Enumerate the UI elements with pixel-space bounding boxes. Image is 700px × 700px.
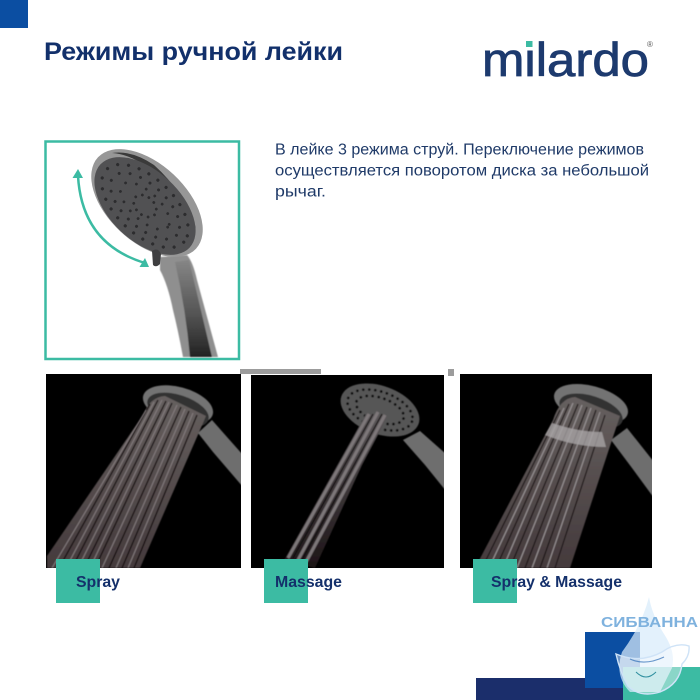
label: Spray & Massage: Spray & Massage — [491, 574, 622, 591]
handle — [403, 431, 446, 491]
decorative grey tabs — [240, 369, 454, 376]
handle — [160, 255, 218, 357]
description text: осуществляется поворотом диска за небольшой — [275, 162, 649, 180]
panel: Massage photo — [251, 373, 446, 568]
head rim and spray face — [71, 129, 223, 277]
title: Режимы ручной лейки — [44, 38, 343, 66]
logo: milardo: milardo — [482, 33, 649, 86]
water spray — [47, 396, 206, 568]
rotation arrow — [72, 169, 149, 267]
watermark: СИБВАННА — [601, 597, 699, 694]
description text: В лейке 3 режима струй. Переключение режимов — [275, 142, 644, 158]
head — [142, 384, 214, 426]
corner accent square — [0, 0, 28, 28]
label: Spray: Spray — [76, 574, 120, 591]
label: Spray — [56, 559, 120, 603]
description text: рычаг. — [275, 184, 326, 200]
lever — [152, 250, 161, 266]
head — [340, 383, 420, 437]
label: Spray & Massage — [473, 559, 622, 603]
logo: milardo: ® — [647, 40, 653, 49]
head — [554, 383, 628, 427]
corner colour blocks — [476, 632, 700, 700]
water spray — [475, 397, 620, 568]
label: Massage: Massage — [275, 574, 342, 591]
handle — [611, 428, 654, 498]
label: Massage — [264, 559, 342, 603]
panel: shower head with rotation arrow — [46, 129, 239, 359]
description text — [275, 142, 649, 200]
water jets — [284, 412, 388, 568]
handle — [198, 420, 243, 487]
panel: Spray photo — [46, 374, 243, 568]
panel: Spray & Massage photo — [460, 374, 654, 568]
watermark: СИБВАННА: СИБВАННА — [601, 615, 699, 631]
